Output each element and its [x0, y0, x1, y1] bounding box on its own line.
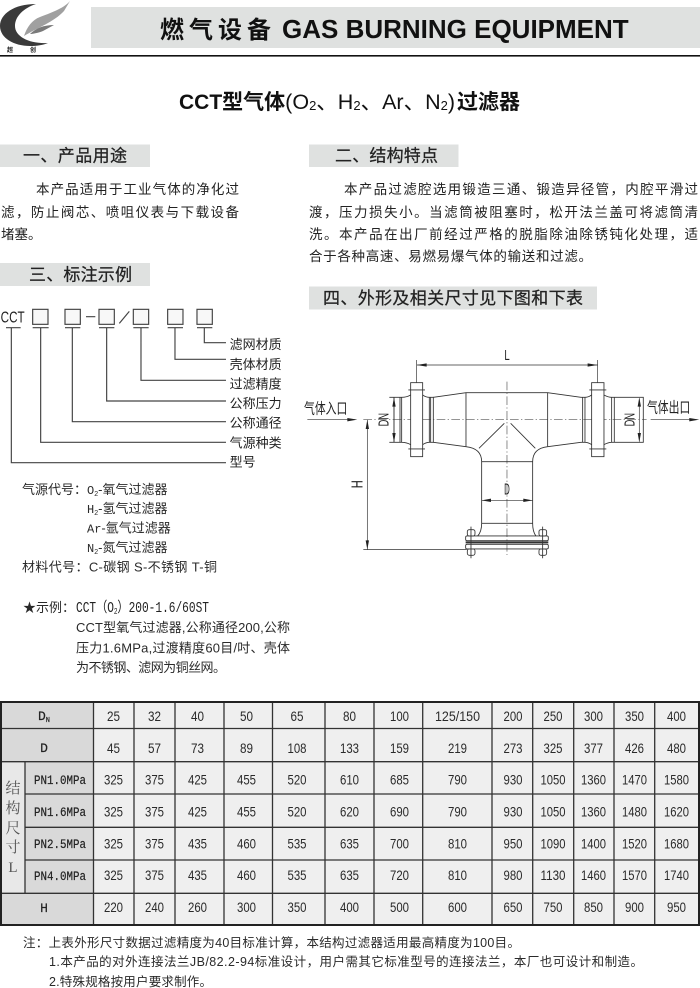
row DN: 100 [390, 708, 409, 724]
row PN2.5: 535 [288, 836, 307, 852]
row label: structure size L: 结 [5, 777, 21, 798]
row DN: 65 [290, 708, 304, 724]
row H: 500 [390, 899, 409, 915]
footnotes: 1.本产品的对外连接法兰JB/82.2-94标准设计，用户需其它标准型号的连接法兰，本厂也可设计和制造。 [49, 954, 643, 969]
header band [91, 7, 700, 48]
row PN1.0 [34, 772, 689, 788]
main title: 2 [309, 98, 316, 113]
row PN1.6: 690 [390, 804, 409, 820]
row PN1.0: 1470 [622, 772, 647, 788]
row H: 240 [145, 899, 164, 915]
row H: 850 [584, 899, 603, 915]
heading: structure features [309, 144, 458, 167]
row D: 480 [667, 740, 686, 756]
logo [0, 1, 70, 54]
main title: 、Ar、N [361, 90, 441, 114]
row PN1.0: PN1.0MPa [34, 773, 86, 788]
row PN1.6: 1360 [581, 804, 606, 820]
row PN2.5: 435 [188, 836, 207, 852]
structure features text: 洗。本产品在出厂前经过严格的脱脂除油除锈钝化处理，适 [309, 226, 698, 242]
main title: 、H [316, 90, 353, 114]
row PN2.5: 635 [340, 836, 359, 852]
row PN4.0: 1740 [664, 867, 689, 883]
row D: 273 [504, 740, 523, 756]
table fills [1, 702, 699, 925]
code legend: -氮气过滤器 [98, 540, 167, 555]
code legend: O [87, 484, 94, 498]
main title: CCT型气体(O [179, 90, 309, 114]
row PN1.0: 930 [504, 772, 523, 788]
row D: 108 [288, 740, 307, 756]
heading: product use: 一、产品用途 [23, 146, 127, 166]
row PN1.0: 375 [145, 772, 164, 788]
main title: 2 [441, 98, 448, 113]
row D: 89 [240, 740, 253, 756]
row D: D [40, 741, 48, 756]
main title: 2 [353, 98, 361, 113]
row PN1.6: 1620 [664, 804, 689, 820]
row DN: 125/150 [435, 708, 480, 724]
code legend: 2 [94, 510, 98, 517]
row DN: 300 [584, 708, 603, 724]
structure features text: 渡，压力损失小。当滤筒被阻塞时，松开法兰盖可将滤筒清 [309, 204, 698, 220]
code legend [22, 482, 217, 574]
example note: 为不锈钢、滤网为铜丝网。 [76, 660, 226, 675]
row H: 220 [104, 899, 123, 915]
main title: ) [448, 90, 455, 114]
row DN: N [46, 717, 50, 725]
row PN2.5: 1680 [664, 836, 689, 852]
row PN2.5: 1090 [540, 836, 566, 852]
structure features text [309, 182, 698, 264]
row D: 73 [191, 740, 204, 756]
code labels: 壳体材质 [230, 357, 282, 372]
header title: GAS BURNING EQUIPMENT [282, 14, 629, 44]
row D: 159 [390, 740, 409, 756]
example note: 2 [114, 607, 118, 616]
row label: structure size L: 尺 [5, 817, 21, 838]
row D: 133 [340, 740, 359, 756]
row H: 260 [188, 899, 207, 915]
code legend: -氧气过滤器 [98, 482, 167, 497]
row PN2.5: 1400 [581, 836, 606, 852]
row H: 300 [237, 899, 256, 915]
row DN [38, 708, 686, 725]
dimension lines [307, 360, 699, 550]
product use text [1, 182, 240, 242]
header rule [0, 55, 700, 57]
row DN: 350 [625, 708, 644, 724]
example note: CCT型氧气过滤器,公称通径200,公称 [76, 620, 290, 635]
row PN1.6: 425 [188, 804, 207, 820]
pipe body [389, 383, 643, 558]
row PN1.0: 685 [390, 772, 409, 788]
row H: 350 [288, 899, 307, 915]
example note: ）200-1.6/60ST [117, 599, 209, 617]
row PN4.0 [34, 867, 689, 884]
row PN4.0: 720 [390, 867, 409, 883]
row label: structure size L: 构 [5, 797, 21, 818]
row PN1.0: 790 [448, 772, 467, 788]
row DN: 32 [148, 708, 161, 724]
code labels: 滤网材质 [230, 337, 282, 352]
code legend: 气源代号： [22, 482, 87, 497]
row PN1.0: 520 [288, 772, 307, 788]
row D: 219 [448, 740, 467, 756]
row D: 45 [107, 740, 120, 756]
header title: 燃气设备 [160, 17, 276, 44]
row PN4.0: 1570 [622, 867, 647, 883]
row PN4.0: 375 [145, 867, 164, 883]
structure features text: 本产品过滤腔选用锻造三通、锻造异径管，内腔平滑过 [344, 182, 698, 197]
product use text: 堵塞。 [1, 226, 42, 242]
row D: 426 [625, 740, 644, 756]
row PN1.6: PN1.6MPa [34, 805, 86, 820]
code legend: Ar-氩气过滤器 [87, 520, 171, 536]
row D: 377 [584, 740, 603, 756]
row PN1.6: 1050 [540, 804, 566, 820]
row PN4.0: 810 [448, 867, 467, 883]
code labels [230, 337, 282, 470]
row PN4.0: 980 [504, 867, 523, 883]
row PN1.6: 325 [104, 804, 123, 820]
row PN4.0: 460 [237, 867, 256, 883]
row PN1.6: 620 [340, 804, 359, 820]
row H: 650 [504, 899, 523, 915]
filter technical drawing: DN [622, 413, 638, 426]
model code diagram [1, 309, 282, 470]
row PN2.5: 950 [504, 836, 523, 852]
row PN2.5: 1520 [622, 836, 647, 852]
heading: labelling example [0, 263, 150, 286]
row H: 400 [340, 899, 359, 915]
row D: 325 [544, 740, 563, 756]
row PN1.0: 425 [188, 772, 207, 788]
specification table [1, 702, 699, 925]
example note: ★示例： [23, 600, 75, 615]
dimension letters: L [504, 348, 510, 364]
code legend: 材料代号：C-碳钢 S-不锈钢 T-铜 [22, 560, 217, 574]
heading: dimensions: 四、外形及相关尺寸见下图和下表 [323, 289, 583, 308]
code labels: 过滤精度 [230, 377, 282, 392]
row H: H [40, 901, 48, 916]
row PN2.5: 700 [390, 836, 409, 852]
structure features text: 合于各种高速、易燃易爆气体的输送和过滤。 [309, 248, 592, 264]
panel: structure features [309, 144, 698, 264]
row H: 950 [667, 899, 686, 915]
code labels: 气源种类 [230, 435, 282, 450]
row label: structure size L: 寸 [5, 836, 21, 857]
row PN1.6: 520 [288, 804, 307, 820]
table grid [1, 702, 699, 925]
row PN4.0: 1460 [581, 867, 606, 883]
row D: 57 [148, 740, 161, 756]
row PN4.0: 325 [104, 867, 123, 883]
row DN: 40 [191, 708, 204, 724]
row DN: 80 [343, 708, 356, 724]
centre lines [363, 382, 647, 555]
row PN4.0: 1130 [540, 867, 566, 883]
row D [40, 740, 686, 756]
row PN2.5: 460 [237, 836, 256, 852]
row PN4.0: PN4.0MPa [34, 869, 86, 884]
row PN1.6: 1480 [622, 804, 647, 820]
heading: structure features: 二、结构特点 [335, 146, 438, 166]
row H [40, 899, 686, 916]
footnotes [23, 935, 643, 988]
row PN2.5 [34, 836, 689, 852]
row H: 750 [544, 899, 563, 915]
example note: 压力1.6MPa,过渡精度60目/吋、壳体 [76, 640, 290, 656]
footnotes: 注：上表外形尺寸数据过滤精度为40目标准计算，本结构过滤器适用最高精度为100目。 [23, 935, 520, 950]
example note [23, 599, 290, 675]
model code diagram: CCT [1, 309, 25, 326]
row H: 900 [625, 899, 644, 915]
row PN1.6: 930 [504, 804, 523, 820]
row PN4.0: 635 [340, 867, 359, 883]
row PN1.6: 790 [448, 804, 467, 820]
row PN2.5: 325 [104, 836, 123, 852]
filter technical drawing: H [350, 480, 367, 488]
row PN1.6 [34, 804, 689, 820]
code labels: 型号 [230, 455, 256, 470]
logo: 创 [30, 46, 36, 54]
panel: product use [0, 144, 240, 242]
code legend: -氢气过滤器 [98, 501, 167, 516]
product use text: 本产品适用于工业气体的净化过 [36, 182, 240, 197]
row PN2.5: 375 [145, 836, 164, 852]
row DN: 200 [504, 708, 523, 724]
main title: 过滤器 [457, 91, 520, 114]
heading: product use [0, 144, 150, 167]
row PN4.0: 435 [188, 867, 207, 883]
row PN1.0: 610 [340, 772, 359, 788]
filter technical drawing: DN [376, 413, 392, 426]
code legend: H [87, 503, 94, 517]
filter technical drawing: D [504, 482, 510, 499]
row PN2.5: PN2.5MPa [34, 837, 86, 852]
row DN: 50 [240, 708, 253, 724]
row label: structure size L [5, 777, 21, 876]
row DN: 400 [667, 708, 686, 724]
code legend: N [87, 542, 94, 556]
row H: 600 [448, 899, 467, 915]
example note: CCT（O [76, 599, 114, 617]
row label: structure size L: L [8, 860, 18, 876]
row PN1.0: 1360 [581, 772, 606, 788]
row DN: 250 [544, 708, 563, 724]
code labels: 公称压力 [230, 396, 282, 411]
row PN1.0: 1050 [540, 772, 566, 788]
row PN2.5: 810 [448, 836, 467, 852]
filter technical drawing [304, 348, 699, 558]
row PN1.0: 1580 [664, 772, 689, 788]
product use text: 滤，防止阀芯、喷咀仪表与下载设备 [1, 204, 240, 220]
inlet label: 气体入口 [304, 400, 347, 417]
code legend: 2 [94, 549, 98, 556]
row DN: 25 [107, 708, 120, 724]
heading: labelling example: 三、标注示例 [29, 266, 132, 284]
code labels: 公称通径 [230, 416, 282, 431]
logo: 超 [7, 46, 13, 54]
row PN4.0: 535 [288, 867, 307, 883]
row PN1.6: 375 [145, 804, 164, 820]
row PN1.0: 455 [237, 772, 256, 788]
row DN: D [38, 709, 46, 724]
row PN1.0: 325 [104, 772, 123, 788]
code legend: 2 [94, 491, 98, 498]
row PN1.6: 455 [237, 804, 256, 820]
